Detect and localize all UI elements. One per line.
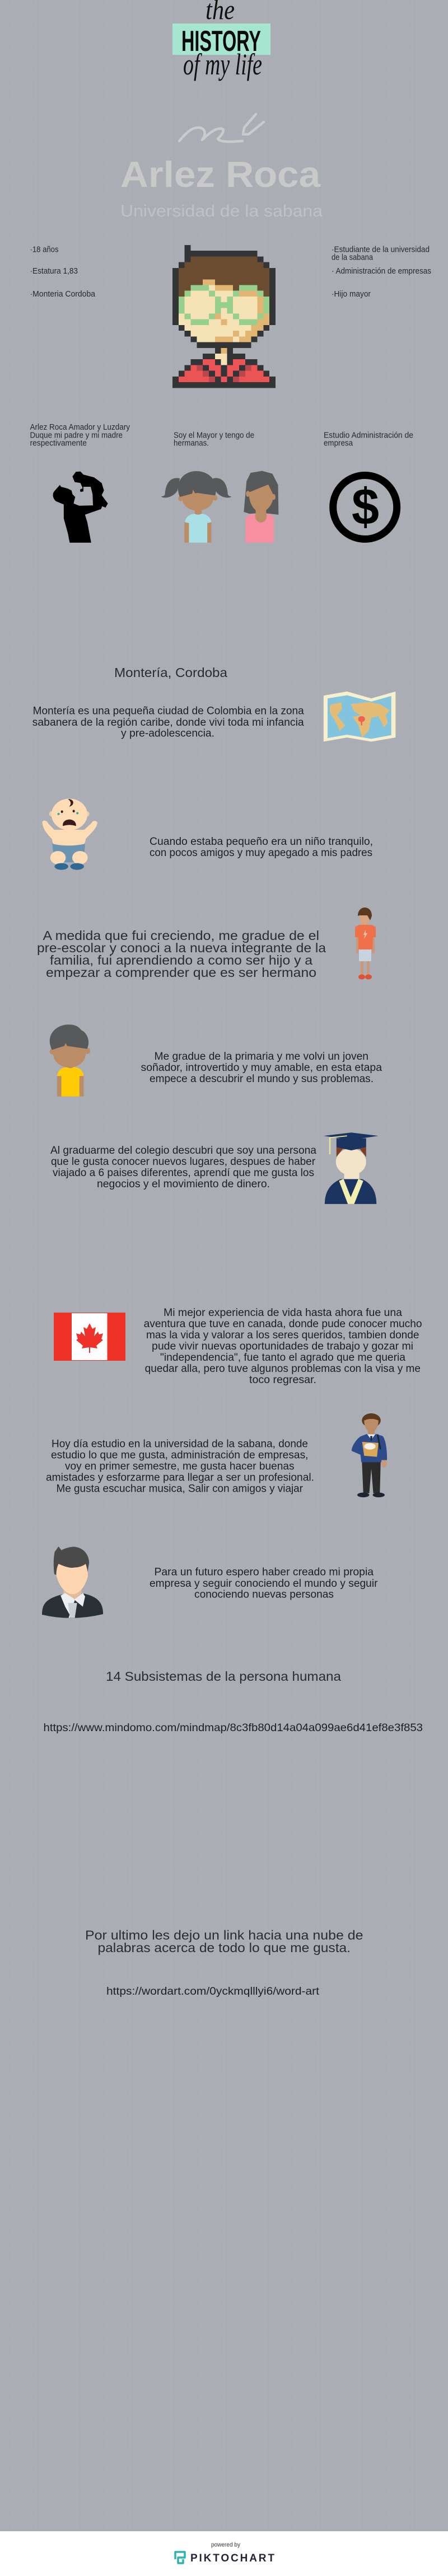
text block: primary school: empece a descubrir el mundo y sus problemas.: [150, 1073, 374, 1085]
text block: Canada experience: toco regresar.: [249, 1374, 316, 1386]
text block: Canada experience: pude vivir nuevas oportunidades de trabajo y gozar mi: [152, 1341, 413, 1352]
text block: personal facts left: ·Monteria Cordoba: [30, 289, 96, 299]
link: wordart: https://wordart.com/0yckmqlllyi6/word-art: [106, 1986, 320, 1997]
younger sister: [161, 471, 231, 543]
text block: Canada experience: aventura que tuve en canada, donde pude conocer mucho: [144, 1318, 422, 1330]
text block: studies: [324, 431, 413, 448]
text block: studies: empresa: [324, 439, 353, 448]
subheading: university: Universidad de la sabana: [120, 202, 323, 220]
text block: childhood: con pocos amigos y muy apegado a mis padres: [150, 847, 372, 859]
text block: growing up: A medida que fui creciendo, me gradue de el: [43, 928, 319, 943]
icon: signature and pen: [179, 114, 264, 142]
heading: Monteria: Montería, Cordoba: [114, 665, 227, 680]
text block: graduating school: que le gusta conocer nuevos lugares, despues de haber: [51, 1156, 316, 1168]
text block: Monteria description: [32, 706, 304, 740]
link: mindomo: https://www.mindomo.com/mindmap/8c3fb80d14a04a099ae6d41ef8e3f853: [44, 1722, 423, 1734]
title band: mint rectangle: [172, 23, 270, 55]
text block: personal facts left: ·Estatura 1,83: [30, 266, 78, 276]
text block: future plans: empresa y seguir conociendo el mundo y seguir: [150, 1578, 378, 1590]
text block: Canada experience: mas la vida y valorar a los seres queridos, tambien donde: [146, 1329, 419, 1341]
text block: childhood: [150, 836, 373, 859]
text block: Canada experience: "independencia", fue tanto el agrado que me queria: [160, 1352, 405, 1364]
title word: HISTORY: HISTORY: [181, 25, 261, 58]
text block: growing up: empezar a comprender que es ser hermano: [46, 965, 316, 980]
text block: closing note: palabras acerca de todo lo que me gusta.: [97, 1940, 351, 1955]
text block: graduating school: [50, 1145, 316, 1190]
text block: siblings: hermanas.: [174, 439, 209, 448]
icon: pixel art avatar with green glasses: [172, 245, 276, 388]
text block: Monteria description: sabanera de la región caribe, donde vivi toda mi infancia: [32, 717, 304, 728]
footer wordmark: PIKTOCHART: [190, 2553, 274, 2564]
icon: businessman avatar: [42, 1546, 103, 1618]
footer caption: powered by: [211, 2542, 240, 2549]
text block: university today: Me gusta escuchar musica, Salir con amigos y viajar: [56, 1483, 304, 1495]
text block: Canada experience: Mi mejor experiencia de vida hasta ahora fue una: [164, 1307, 402, 1319]
text block: closing note: Por ultimo les dejo un link hacia una nube de: [85, 1928, 363, 1943]
text block: personal facts left: [30, 245, 96, 299]
text block: primary school: soñador, introvertido y muy amable, en esta etapa: [141, 1062, 382, 1074]
icon: crying baby: [42, 798, 97, 870]
text block: parents: respectivamente: [30, 439, 87, 448]
text block: graduating school: negocios y el movimiento de dinero.: [97, 1178, 270, 1190]
text block: personal facts right: [332, 245, 431, 299]
text block: parents: Arlez Roca Amador y Luzdary: [30, 422, 130, 432]
text block: university today: Hoy día estudio en la universidad de la sabana, donde: [52, 1438, 308, 1450]
icon: dollar coin: [333, 476, 397, 539]
icon: dollar coin: $: [352, 478, 379, 535]
text block: primary school: [141, 1051, 382, 1085]
heading: subsystems: 14 Subsistemas de la persona humana: [106, 1669, 341, 1684]
text block: personal facts left: ·18 años: [30, 245, 58, 254]
footer: powered by piktochart: [175, 2542, 274, 2564]
text block: personal facts right: ·Hijo mayor: [332, 289, 371, 299]
text block: future plans: [150, 1567, 378, 1601]
text block: graduating school: viajado a 6 paises diferentes, aprendí que me gusta los: [53, 1167, 314, 1179]
heading: name: Arlez Roca: [120, 154, 321, 195]
icon: piktochart logo: [175, 2552, 185, 2563]
icon: kid in yellow shirt: [50, 1024, 90, 1097]
text block: future plans: conociendo nuevas personas: [194, 1589, 334, 1601]
text block: siblings: Soy el Mayor y tengo de: [174, 431, 254, 440]
text block: personal facts right: ·Estudiante de la universidad: [332, 245, 430, 254]
title: the history of my life: [172, 0, 270, 81]
text block: closing note: [85, 1928, 363, 1955]
text block: Monteria description: Montería es una pequeña ciudad de Colombia en la zona: [33, 706, 304, 717]
text block: Canada experience: quedar alla, pero tuve algunos problemas con la visa y me: [145, 1363, 421, 1375]
text block: growing up: familia, fui aprendiendo a como ser hijo y a: [50, 953, 312, 967]
text block: future plans: Para un futuro espero haber creado mi propia: [155, 1567, 374, 1578]
text block: graduating school: Al graduarme del colegio descubri que soy una persona: [50, 1145, 316, 1157]
text block: growing up: pre-escolar y conoci a la nueva integrante de la: [37, 941, 326, 955]
text block: university today: voy en primer semestre, me gusta hacer buenas: [65, 1460, 295, 1473]
text block: growing up: [37, 928, 326, 980]
text block: childhood: Cuando estaba pequeño era un niño tranquilo,: [150, 836, 373, 848]
text block: parents: Duque mi padre y mi madre: [30, 431, 123, 440]
icon: world map with pin: [324, 692, 395, 741]
text block: university today: estudio lo que me gusta, administración de empresas,: [51, 1449, 308, 1461]
icon: two sisters: [161, 471, 278, 543]
icon: student with book: [352, 1413, 387, 1497]
older sister: [244, 471, 278, 543]
text block: personal facts right: · Administración de empresas: [332, 266, 431, 276]
text block: siblings: [174, 431, 254, 448]
icon: father lifting baby silhouette: [53, 472, 108, 543]
text block: university today: amistades y esforzarme para llegar a ser un profesional.: [46, 1472, 314, 1484]
icon: graduate with cap and gown: [324, 1132, 379, 1204]
text block: primary school: Me gradue de la primaria y me volvi un joven: [155, 1051, 368, 1063]
text block: parents: [30, 422, 130, 448]
text block: Canada experience: [144, 1307, 422, 1386]
icon: boy in orange shirt: [355, 908, 376, 979]
title words: of my life: of my life: [183, 48, 262, 81]
icon: Canadian flag: [54, 1313, 125, 1361]
text block: studies: Estudio Administración de: [324, 431, 413, 440]
text block: university today: [46, 1438, 314, 1495]
text block: personal facts right: de la sabana: [332, 252, 374, 262]
text block: Monteria description: y pre-adolescencia.: [121, 728, 214, 740]
